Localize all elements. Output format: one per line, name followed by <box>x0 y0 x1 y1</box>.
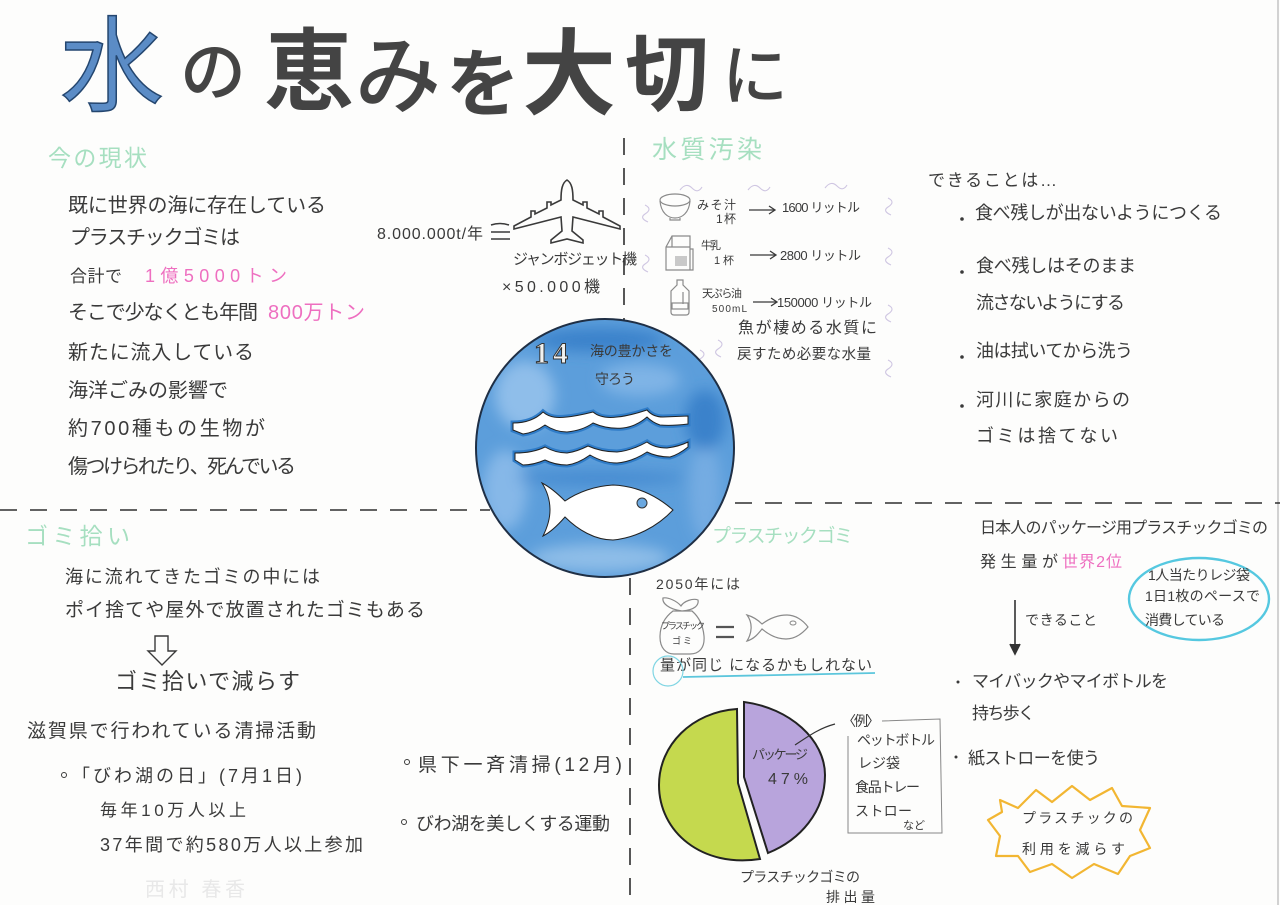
text: what we can do: できること <box>1025 612 1097 628</box>
examples box: レジ袋 <box>858 755 900 771</box>
goal name <box>590 343 673 387</box>
text block: ocean plastic facts: 傷つけられたり、死んでいる <box>68 455 296 478</box>
text block: second in world: 日本人のパッケージ用プラスチックゴミの <box>980 518 1268 537</box>
water for miso soup: 1600 リットル <box>782 200 860 215</box>
jet count: ×50.000機 <box>502 278 600 296</box>
list of actions <box>960 203 1222 446</box>
heading: what we can do: できることは… <box>928 171 1057 190</box>
text block: Lake Biwa day: 「びわ湖の日」(7月1日) <box>72 766 302 786</box>
title: 切 <box>625 28 709 122</box>
goal number: 14 <box>534 337 568 370</box>
text: Shiga cleanup heading: 滋賀県で行われている清掃活動 <box>27 720 316 742</box>
milk label: 1杯 <box>714 253 734 267</box>
list of actions: 油は拭いてから洗う <box>976 341 1133 361</box>
title: 水 <box>60 10 164 126</box>
icon: trash bag: ゴミ <box>672 635 692 646</box>
title <box>60 10 788 127</box>
text block: other cleanups: 県下一斉清掃(12月) <box>418 754 622 776</box>
tempura oil label: 天ぷら油 <box>702 286 742 300</box>
pie label: パッケージ <box>752 747 808 762</box>
water for milk: 2800 リットル <box>780 248 861 263</box>
arrow <box>750 251 776 259</box>
list of actions: マイバックやマイボトルを <box>972 672 1168 691</box>
callout: shopping bags: 消費している <box>1145 612 1225 628</box>
waves <box>513 410 688 465</box>
heading: plastic waste: プラスチックゴミ <box>712 525 853 547</box>
title: に <box>722 39 788 113</box>
list of actions: 流さないようにする <box>976 293 1125 313</box>
pie chart <box>659 702 825 860</box>
text block: Lake Biwa day <box>62 766 363 855</box>
text block: litter source <box>65 567 425 621</box>
milk label: 牛乳 <box>701 238 721 252</box>
icon: SDG 14 badge <box>476 319 734 577</box>
text block: second in world <box>980 518 1268 571</box>
title: を <box>446 43 520 126</box>
text block: ocean plastic facts: 800万トン <box>268 302 365 324</box>
panel: litter pickup <box>25 523 622 901</box>
list of actions: 紙ストローを使う <box>968 748 1100 768</box>
examples box: 〈例〉 <box>842 713 880 729</box>
text block: ocean plastic facts <box>68 194 365 478</box>
callout: same amount: 量が同じ になるかもしれない <box>660 657 872 674</box>
miso soup label <box>697 198 736 226</box>
faint name: 西村 春香 <box>145 878 245 901</box>
examples box: ストロー <box>855 803 912 819</box>
list of actions: 河川に家庭からの <box>976 390 1130 410</box>
caption: water needed <box>737 319 877 363</box>
text block: Lake Biwa day: 37年間で約580万人以上参加 <box>100 835 363 855</box>
arrow: down outline <box>148 636 176 665</box>
text block: ocean plastic facts: 合計で <box>70 267 122 286</box>
icon: oil bottle <box>671 280 689 315</box>
water for oil: 150000 リットル <box>777 295 872 310</box>
heading: water pollution: 水質汚染 <box>652 136 762 164</box>
goal name: 海の豊かさを <box>590 343 673 359</box>
text block: ocean plastic facts: 新たに流入している <box>68 341 254 364</box>
fish <box>542 483 673 540</box>
arrow <box>749 206 775 214</box>
tempura oil label: 500mL <box>712 304 747 315</box>
examples box <box>842 713 942 833</box>
equals sign <box>491 224 510 239</box>
text block: Lake Biwa day: 毎年10万人以上 <box>100 801 246 820</box>
arrow: down <box>1010 600 1020 654</box>
milk label <box>701 238 734 267</box>
pie caption <box>740 869 875 905</box>
heading: litter pickup: ゴミ拾い <box>25 523 130 549</box>
callout: shopping bags: 1人当たりレジ袋 <box>1148 567 1250 583</box>
callout: shopping bags <box>1129 558 1269 640</box>
icon: miso soup bowl <box>660 194 690 220</box>
text block: litter source: ポイ捨てや屋外で放置されたゴミもある <box>65 599 425 621</box>
list of actions <box>954 672 1168 768</box>
text block: other cleanups <box>402 754 622 834</box>
list of actions: 食べ残しはそのまま <box>976 256 1136 276</box>
panel: water pollution <box>643 136 892 377</box>
text block: ocean plastic facts: 既に世界の海に存在している <box>68 194 326 217</box>
pie value: 47% <box>768 771 808 788</box>
icon: milk carton <box>666 236 693 270</box>
annual amount: 8.000.000t/年 <box>377 225 483 243</box>
text block: ocean plastic facts: そこで少なくとも年間 <box>68 301 258 324</box>
text block: second in world: 発生量が <box>980 553 1058 571</box>
miso soup label: 1杯 <box>716 212 736 226</box>
text block: litter source: 海に流れてきたゴミの中には <box>65 567 320 587</box>
pie caption: プラスチックゴミの <box>740 869 860 885</box>
panel: what we can do about water <box>928 171 1222 446</box>
icon: trash bag <box>660 598 705 654</box>
callout: shopping bags: 1日1枚のペースで <box>1145 588 1260 604</box>
equals sign <box>716 627 734 637</box>
text block: other cleanups: びわ湖を美しくする運動 <box>416 814 610 834</box>
panel: Japan packaging waste <box>954 518 1269 878</box>
tempura oil label <box>702 286 747 315</box>
title: の <box>180 35 246 109</box>
icon: airplane <box>514 180 620 243</box>
icon: trash bag: プラスチック <box>661 621 705 631</box>
list of actions: 食べ残しが出ないようにつくる <box>975 203 1222 223</box>
text: by 2050: 2050年には <box>656 576 740 592</box>
panel: current situation <box>48 145 365 478</box>
miso soup label: みそ汁 <box>697 198 736 212</box>
pie caption: 排出量 <box>826 889 875 905</box>
list of actions: ゴミは捨てない <box>976 426 1118 446</box>
text block: ocean plastic facts: 1億5000トン <box>145 266 287 286</box>
examples box: 食品トレー <box>855 779 920 795</box>
text block: ocean plastic facts: プラスチックゴミは <box>70 226 240 249</box>
goal name: 守ろう <box>595 371 635 387</box>
leader line <box>795 724 835 745</box>
title: み <box>355 29 441 125</box>
title: 恵 <box>264 23 354 123</box>
panel: jumbo jet comparison <box>377 180 637 296</box>
caption: water needed: 魚が棲める水質に <box>738 319 877 337</box>
callout: reduce plastic <box>988 786 1150 878</box>
arrow <box>753 298 777 306</box>
examples box: ペットボトル <box>857 732 935 748</box>
text block: ocean plastic facts: 約700種もの生物が <box>68 417 265 440</box>
callout: same amount <box>653 656 875 686</box>
examples box: など <box>903 819 925 832</box>
callout: reduce plastic: 利用を減らす <box>1022 841 1125 857</box>
text: reduce by picking up: ゴミ拾いで減らす <box>115 669 300 694</box>
list of actions: 持ち歩く <box>972 704 1035 723</box>
caption: water needed: 戻すため必要な水量 <box>737 346 871 363</box>
title: 大 <box>522 22 616 127</box>
text block: second in world: 世界2位 <box>1062 553 1122 571</box>
heading: current situation: 今の現状 <box>48 145 147 171</box>
jet label: ジャンボジェット機 <box>513 251 637 268</box>
panel: plastic waste <box>653 525 942 905</box>
text block: ocean plastic facts: 海洋ごみの影響で <box>68 379 228 402</box>
callout: reduce plastic: プラスチックの <box>1022 810 1133 826</box>
icon: fish outline <box>747 615 808 641</box>
